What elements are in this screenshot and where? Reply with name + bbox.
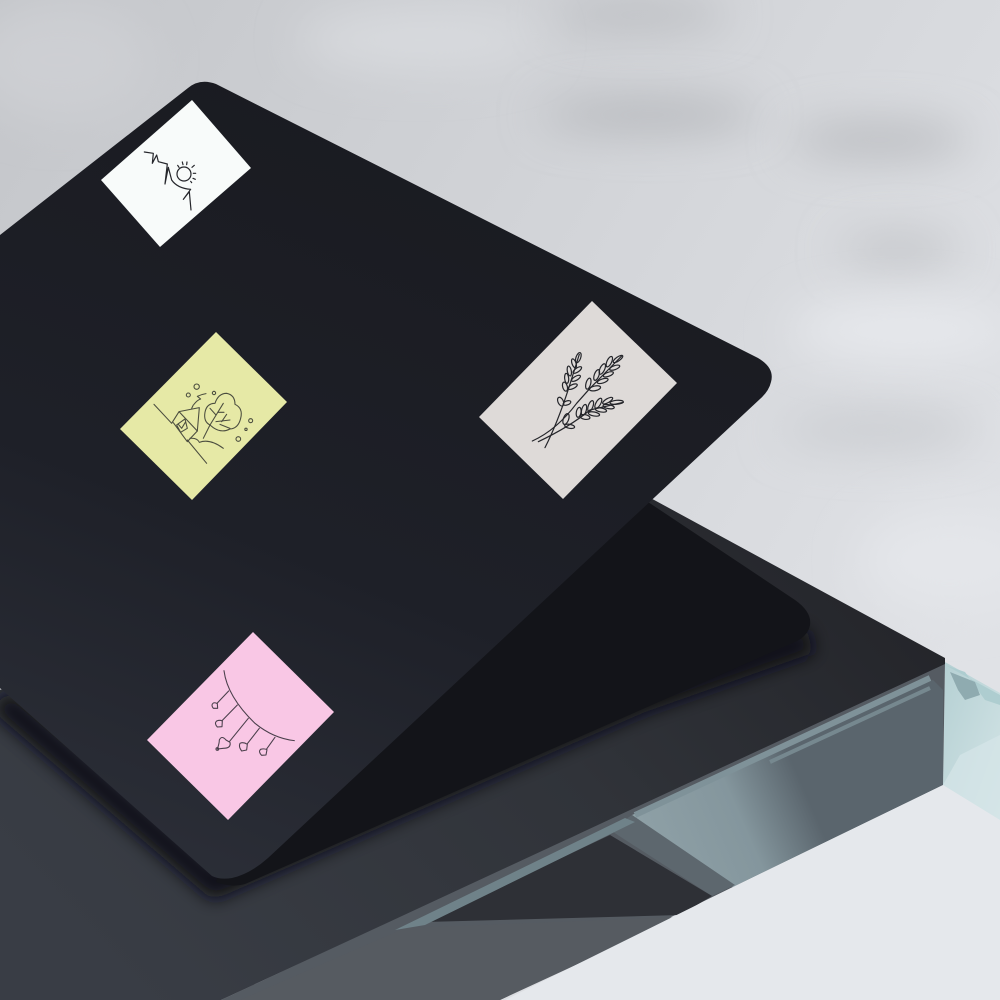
- icon: wheat stalks: [532, 352, 624, 448]
- sticker: house and tree: [120, 332, 287, 500]
- icon: house and tree: [154, 384, 253, 463]
- sticker: heart garland: [147, 632, 334, 820]
- glass table front edge: [221, 662, 945, 1000]
- laptop base: [216, 500, 810, 886]
- sticker: wheat: [479, 301, 677, 499]
- icon: mountain and sun: [144, 152, 196, 210]
- black table top: [0, 495, 945, 1000]
- sticker: mountain and sun: [101, 100, 251, 247]
- icon: heart garland: [212, 671, 294, 755]
- floor / white table surface: [505, 785, 1000, 1000]
- glass table leg on the right: [943, 662, 1000, 822]
- laptop lid: [0, 82, 772, 879]
